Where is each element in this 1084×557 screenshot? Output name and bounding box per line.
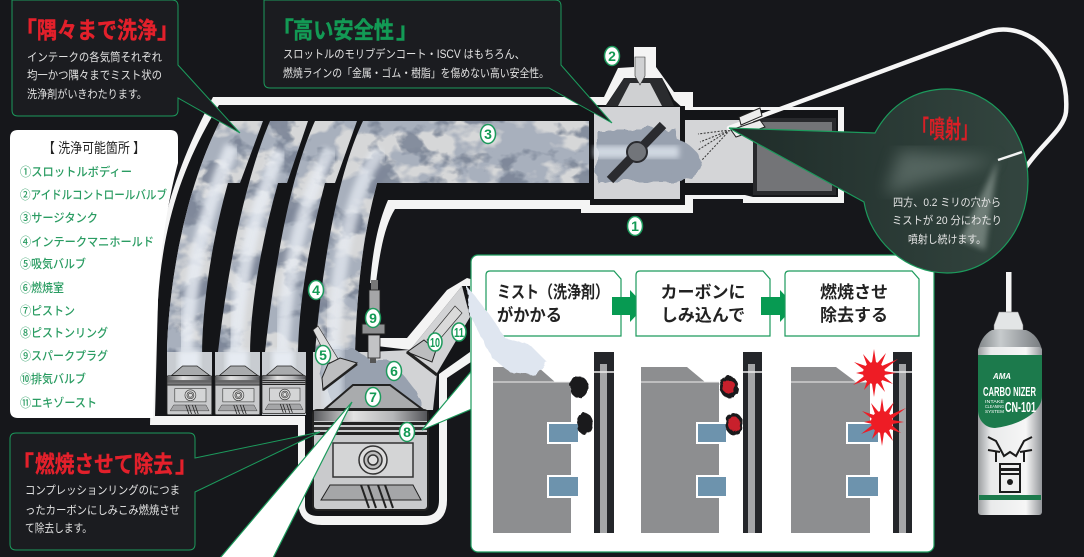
badge 4 <box>308 280 324 300</box>
spark plug <box>362 280 385 363</box>
callout: burn and remove: ったカーボンにしみこみ燃焼させ <box>25 503 180 517</box>
callout: thorough cleaning: 「 <box>14 17 37 43</box>
panel: cleanable parts list: 【 洗浄可能箇所 】 <box>43 140 145 156</box>
badge 5: 5 <box>319 347 327 363</box>
panel: cleanable parts list: ④インテークマニホールド <box>20 235 154 249</box>
badge 3: 3 <box>484 126 492 142</box>
callout: high safety: 「 <box>271 17 294 43</box>
callout bubble: injection: 噴射し続けます。 <box>908 232 986 246</box>
wedge: piston ring to detail panel <box>422 368 474 430</box>
callout: high safety <box>264 0 612 123</box>
badge 1 <box>628 216 642 236</box>
callout: thorough cleaning: インテークの各気筒それぞれ <box>27 50 162 64</box>
callout: burn and remove: 」 <box>175 451 198 477</box>
diagram two: carbon soaked <box>641 352 762 533</box>
callout bubble: injection <box>729 89 1028 273</box>
surge tank and manifold runners with mist <box>167 121 589 352</box>
badge 4: 4 <box>312 282 320 298</box>
step three box: 除去する <box>820 306 888 325</box>
panel: cleanable parts list: ⑤吸気バルブ <box>20 256 86 271</box>
callout: thorough cleaning <box>12 0 240 133</box>
can engine illustration <box>988 437 1032 492</box>
large piston <box>313 385 428 510</box>
intake valve <box>313 326 357 390</box>
step three box <box>785 271 919 336</box>
step three box: 燃焼させ <box>820 282 888 302</box>
badge 6: 6 <box>390 363 398 379</box>
runner separators <box>202 121 363 352</box>
injector spray <box>698 130 730 160</box>
badge 9: 9 <box>369 310 377 326</box>
badge 5 <box>316 346 330 364</box>
step one box: がかかる <box>497 305 562 325</box>
panel: cleanable parts list: ⑪エキゾースト <box>20 396 97 410</box>
callout: thorough cleaning: 洗浄剤がいきわたります。 <box>27 87 147 101</box>
panel: cleanable parts list: ⑧ピストンリング <box>20 325 108 340</box>
panel: cleanable parts list: ①スロットルボディー <box>20 164 132 179</box>
spray can: SYSTEM <box>985 409 1004 414</box>
badge 1: 1 <box>631 218 639 234</box>
arrow two <box>761 290 795 322</box>
badge 2 <box>604 46 620 66</box>
step one box <box>486 271 621 336</box>
step two box: カーボンに <box>660 283 746 302</box>
diagram one: mist hits carbon <box>493 352 614 533</box>
badge 6 <box>386 362 402 380</box>
hose <box>729 30 1066 170</box>
wedge: piston to combustion <box>220 402 352 557</box>
callout: burn and remove: 「 <box>11 451 34 477</box>
badge 10 <box>428 333 442 351</box>
callout: high safety: 高い安全性 <box>293 17 394 43</box>
panel: cleanable parts list <box>10 130 178 418</box>
badge 11 <box>452 323 466 341</box>
spray can <box>978 312 1042 515</box>
badge 7 <box>366 388 380 406</box>
combustion chamber <box>313 286 470 410</box>
badge 10: 10 <box>430 335 440 350</box>
small pistons <box>167 350 306 415</box>
callout bubble: injection: 「噴射」 <box>913 116 977 144</box>
panel: cleanable parts list: ⑥燃焼室 <box>20 280 64 295</box>
panel: cleanable parts list: ⑩排気バルブ <box>20 371 86 386</box>
injector <box>731 108 765 137</box>
step one box: ミスト（洗浄剤） <box>497 283 609 302</box>
callout: burn and remove: 燃焼させて除去 <box>35 451 173 477</box>
air filter box <box>755 120 834 193</box>
callout bubble: injection: ミストが 20 分にわたり <box>892 213 1002 227</box>
spray can tube <box>1006 272 1012 312</box>
step two box <box>636 271 770 336</box>
spray can: CARBO NIZER <box>983 384 1036 399</box>
callout: burn and remove <box>10 432 320 550</box>
callout: high safety: 燃焼ラインの「金属・ゴム・樹脂」を傷めない高い安全性。 <box>283 66 549 80</box>
diagram three: carbon burned <box>791 349 912 533</box>
spray can: CN-101 <box>1005 399 1036 416</box>
arrow one <box>612 290 645 322</box>
badge 3 <box>480 124 496 144</box>
callout: high safety: 」 <box>396 17 419 43</box>
badge 11: 11 <box>454 325 464 340</box>
badge 7: 7 <box>369 389 377 405</box>
spray can: AMA <box>992 372 1011 381</box>
spray can: CLEANING <box>985 404 1004 409</box>
panel: cleanable parts list: ⑦ピストン <box>20 304 75 318</box>
badge 2: 2 <box>608 48 616 64</box>
panel: cleanable parts list: ⑨スパークプラグ <box>20 348 108 363</box>
panel: cleanable parts list: ②アイドルコントロールバルブ <box>20 187 167 202</box>
callout bubble: injection: 四方、0.2 ミリの穴から <box>893 195 1001 209</box>
engine intake outline <box>150 47 844 525</box>
badge 8: 8 <box>403 424 411 440</box>
badge 9 <box>366 308 380 328</box>
badge 8 <box>400 422 414 442</box>
callout: high safety: スロットルのモリブデンコート・ISCV はもちろん、 <box>283 47 525 61</box>
panel: carbon removal process <box>471 255 934 552</box>
callout: thorough cleaning: 隅々まで洗浄 <box>37 17 157 43</box>
throttle body <box>590 57 753 205</box>
callout: burn and remove: コンプレッションリングのにつま <box>25 483 180 497</box>
exhaust mist cloud <box>466 285 547 375</box>
callout: burn and remove: て除去します。 <box>25 521 92 535</box>
callout: thorough cleaning: 均一かつ隅々までミスト状の <box>27 68 162 82</box>
exhaust valve <box>407 306 462 375</box>
callout: thorough cleaning: 」 <box>157 17 180 43</box>
spray can: INTAKE <box>985 399 1004 404</box>
panel: cleanable parts list: ③サージタンク <box>20 211 98 225</box>
step two box: しみ込んで <box>661 306 745 325</box>
